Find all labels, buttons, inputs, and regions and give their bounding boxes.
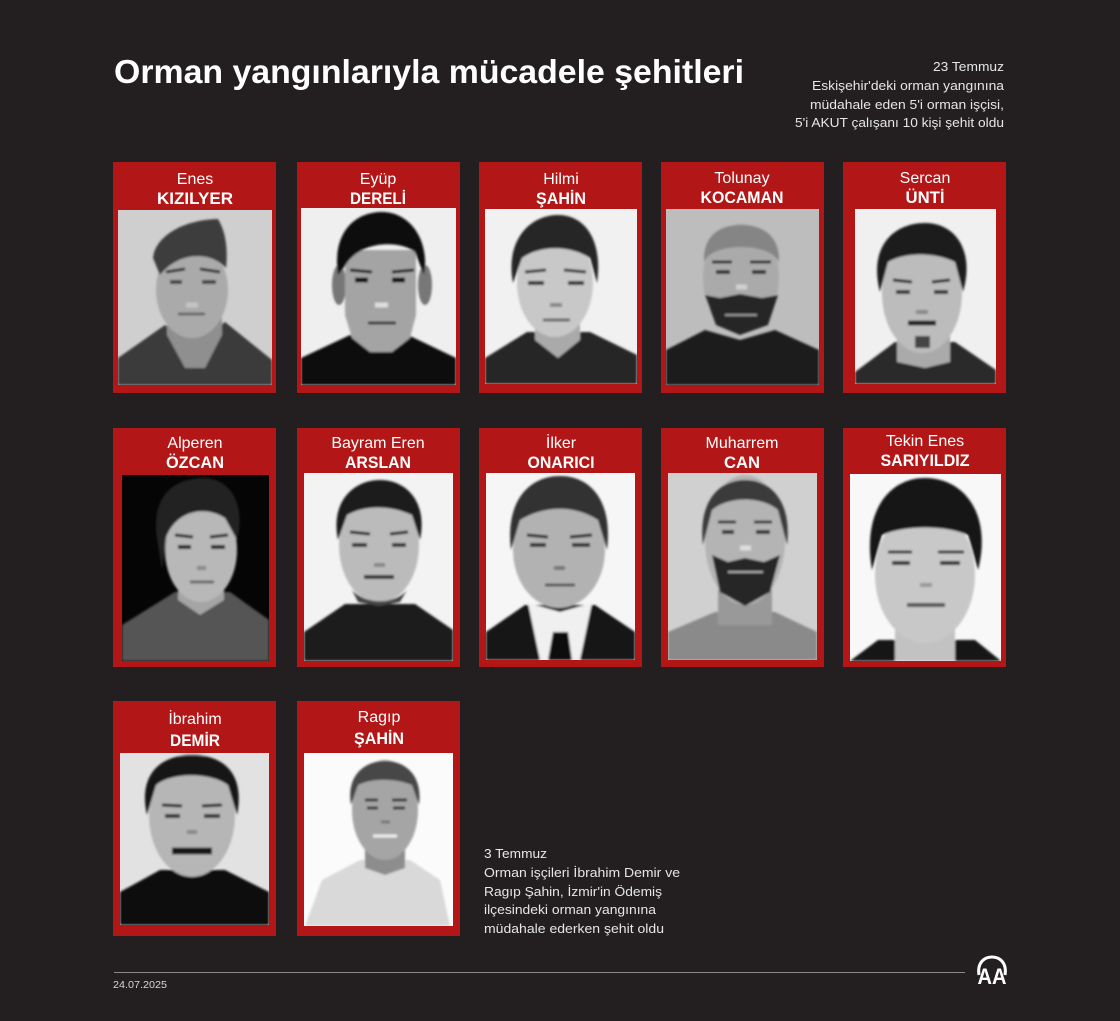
panel: Hilmi Şahin: ŞAHİN — [536, 189, 586, 208]
panel: Tekin Enes Sarıyıldız — [843, 428, 1006, 667]
text block: 3 Temmuz note — [484, 846, 680, 936]
text block: 23 Temmuz summary: Eskişehir'deki orman yangınına — [812, 78, 1005, 93]
title: Orman yangınlarıyla mücadele şehitleri — [114, 53, 744, 90]
panel: Tolunay Kocaman — [661, 162, 824, 393]
photo: Hilmi Şahin — [485, 209, 637, 384]
photo: Sercan Ünti — [855, 209, 996, 384]
photo: İlker Onarıcı — [486, 473, 635, 660]
text block: 23 Temmuz summary: müdahale eden 5'i orman işçisi, — [810, 97, 1004, 112]
text block: 3 Temmuz note: Orman işçileri İbrahim Demir ve — [484, 865, 680, 880]
text block: 3 Temmuz note: müdahale ederken şehit oldu — [484, 921, 664, 936]
panel: İbrahim Demir: İbrahim — [168, 709, 222, 728]
text block: 3 Temmuz note: 3 Temmuz — [484, 846, 547, 861]
panel: Alperen Özcan: Alperen — [167, 435, 223, 452]
photo: Alperen Özcan — [122, 475, 269, 661]
date: 24.07.2025 — [113, 979, 167, 991]
panel: Enes Kızılyer: Enes — [177, 171, 213, 188]
photo: Ragıp Şahin — [304, 753, 453, 926]
panel: İlker Onarıcı — [479, 428, 642, 667]
panel: Sercan Ünti — [843, 162, 1006, 393]
panel: Eyüp Dereli: Eyüp — [360, 171, 396, 188]
photo: İbrahim Demir — [120, 753, 269, 925]
panel: Alperen Özcan: ÖZCAN — [166, 453, 224, 472]
panel: Bayram Eren Arslan — [297, 428, 460, 667]
panel: Sercan Ünti: ÜNTİ — [906, 188, 944, 207]
text block: 3 Temmuz note: ilçesindeki orman yangınına — [484, 902, 657, 917]
panel: Hilmi Şahin — [479, 162, 642, 393]
panel: Muharrem Can — [661, 428, 824, 667]
photo: Tekin Enes Sarıyıldız — [850, 474, 1001, 661]
panel: Bayram Eren Arslan: Bayram Eren — [331, 435, 425, 452]
text block: 23 Temmuz summary — [795, 59, 1005, 130]
photo: Tolunay Kocaman — [666, 209, 819, 385]
photo: Eyüp Dereli — [301, 208, 456, 385]
photo: Enes Kızılyer — [118, 210, 272, 385]
panel: Bayram Eren Arslan: ARSLAN — [345, 453, 411, 472]
photo: Muharrem Can — [668, 473, 817, 660]
panel: Muharrem Can: Muharrem — [706, 435, 778, 452]
panel: Tolunay Kocaman: KOCAMAN — [700, 188, 784, 207]
panel: Ragıp Şahin — [297, 701, 460, 936]
panel: İlker Onarıcı: ONARICI — [528, 453, 594, 472]
panel: Hilmi Şahin: Hilmi — [543, 171, 579, 188]
panel: Enes Kızılyer: KIZILYER — [157, 189, 233, 208]
panel: Alperen Özcan — [113, 428, 276, 667]
panel: Ragıp Şahin: ŞAHİN — [354, 729, 404, 748]
panel: Tekin Enes Sarıyıldız: Tekin Enes — [886, 433, 964, 450]
panel: İbrahim Demir — [113, 701, 276, 936]
panel: Eyüp Dereli: DERELİ — [350, 189, 406, 208]
panel: Sercan Ünti: Sercan — [900, 170, 950, 187]
panel: Tekin Enes Sarıyıldız: SARIYILDIZ — [880, 451, 970, 470]
text block: 3 Temmuz note: Ragıp Şahin, İzmir'in Ödemiş — [484, 884, 663, 899]
panel: Enes Kızılyer — [113, 162, 276, 393]
text block: 23 Temmuz summary: 5'i AKUT çalışanı 10 kişi şehit oldu — [795, 115, 1004, 130]
icon: AA logo: AA — [978, 964, 1007, 989]
panel: İbrahim Demir: DEMİR — [170, 731, 220, 750]
panel: Ragıp Şahin: Ragıp — [358, 709, 400, 726]
panel: Tolunay Kocaman: Tolunay — [714, 170, 770, 187]
panel: Eyüp Dereli — [297, 162, 460, 393]
panel: Muharrem Can: CAN — [724, 453, 760, 472]
text block: 23 Temmuz summary: 23 Temmuz — [933, 59, 1004, 74]
photo: Bayram Eren Arslan — [304, 473, 453, 661]
panel: İlker Onarıcı: İlker — [546, 433, 577, 452]
